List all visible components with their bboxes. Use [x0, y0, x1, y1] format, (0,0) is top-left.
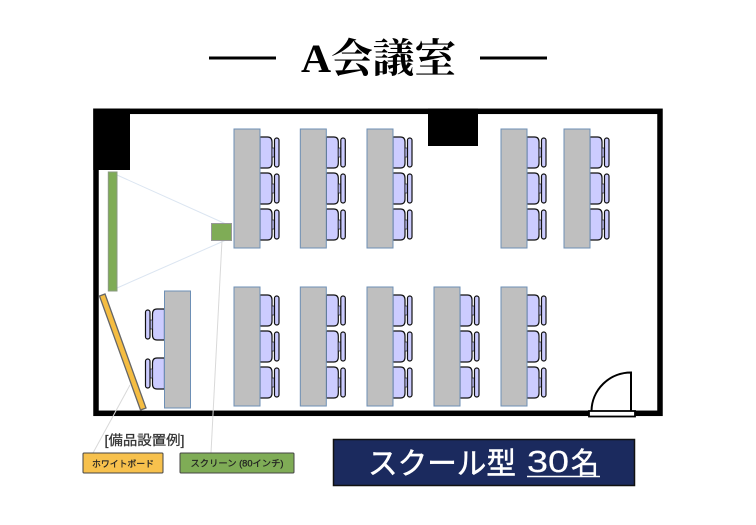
desk: left, facing the other way [146, 291, 190, 408]
label: screen [180, 453, 294, 473]
door [589, 372, 635, 416]
projector [212, 224, 232, 240]
label: whiteboard: ホワイトボード [92, 459, 154, 469]
capacity badge: スクール型 [368, 448, 516, 481]
screen [108, 172, 117, 291]
whiteboard [100, 294, 146, 410]
label: screen: スクリーン (80インチ) [190, 458, 284, 468]
capacity badge [334, 440, 634, 486]
label: whiteboard [83, 453, 163, 473]
projection lines [93, 175, 226, 453]
desks: bottom row [234, 287, 546, 406]
equipment heading: [備品設置例] [104, 433, 184, 448]
room walls [93, 108, 660, 413]
title: A会議室 [301, 36, 456, 81]
capacity badge: 名 [571, 447, 599, 480]
capacity badge: 30 [527, 444, 569, 479]
desks: top row [234, 129, 609, 248]
